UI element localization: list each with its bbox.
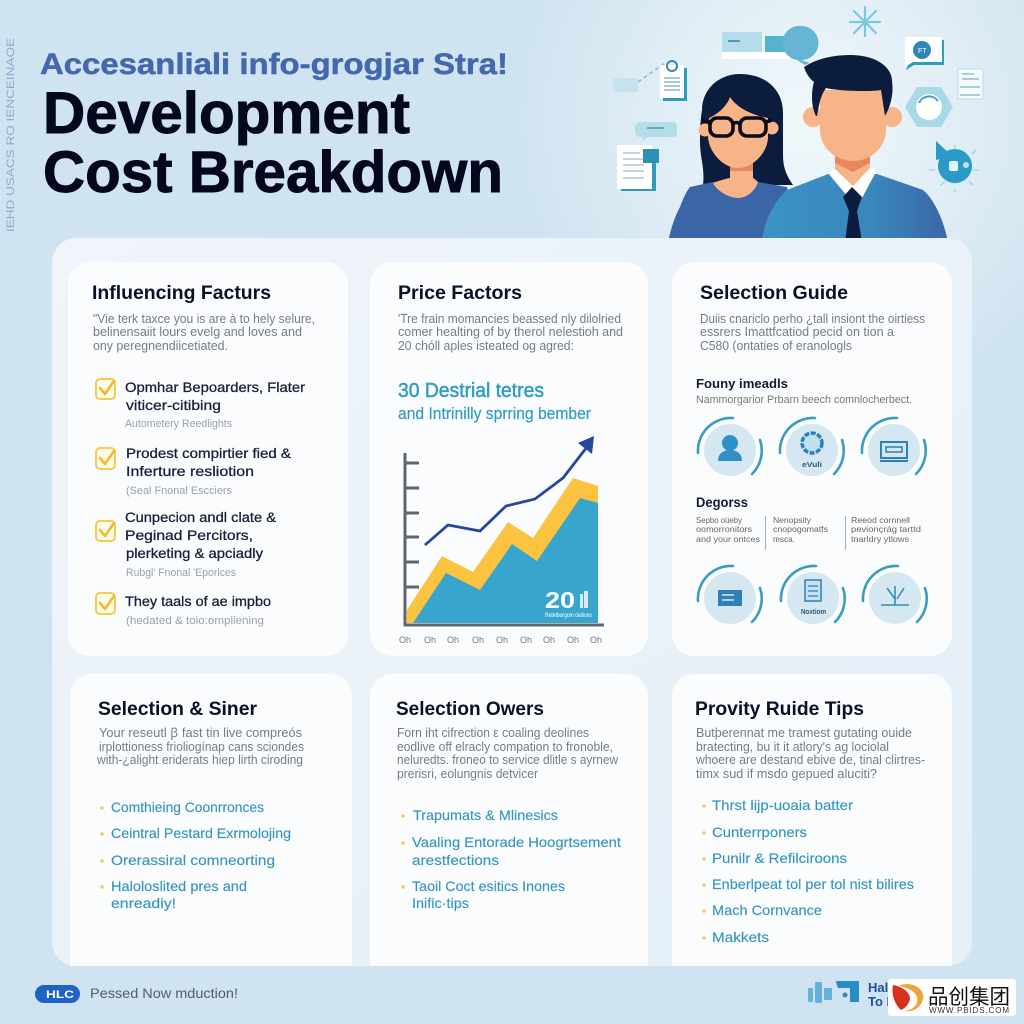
description: "Vie terk taxce you is are à to hely selure, bbox=[93, 312, 315, 326]
x axis labels: Oh bbox=[424, 635, 436, 645]
x axis labels: Oh bbox=[567, 635, 579, 645]
footer right: icons and label bbox=[808, 980, 890, 1009]
subtitle: Accesanliali info-grogjar Stra! bbox=[40, 48, 508, 81]
heading: Selection Owers bbox=[396, 699, 544, 720]
footer right: icons and label: Hal bbox=[868, 980, 888, 995]
item 4: (hedated & toio:ompliening bbox=[126, 615, 264, 627]
trend arrow bbox=[425, 436, 594, 545]
bullet list: Thrst lijp-uoaia batter bbox=[712, 797, 853, 813]
bullet list: Enberlpeat tol per tol nist bilires bbox=[712, 876, 914, 892]
bullet list: Ceintral Pestard Exrmolojing bbox=[111, 825, 291, 841]
panel: provity ruide tips bbox=[672, 674, 952, 966]
item 4 bbox=[96, 593, 271, 627]
bullet list bbox=[702, 797, 914, 945]
description: Forn iht cifrection ε coaling deolines bbox=[397, 726, 589, 740]
x axis labels: Oh bbox=[496, 635, 508, 645]
icon: document left bbox=[617, 145, 659, 191]
description bbox=[93, 312, 315, 353]
description: C580 (ontaties of eranologls bbox=[700, 339, 852, 353]
watermark logo: 品创集团 bbox=[928, 986, 1010, 1009]
heading: Selection Guide bbox=[700, 283, 848, 304]
icon: monitor bbox=[862, 418, 926, 476]
item 2 bbox=[96, 445, 292, 497]
chart heading: and Intrinilly sprring bember bbox=[398, 404, 591, 423]
bullet list: Trapumats & Mlinesics bbox=[413, 807, 558, 823]
item 2: Prodest compirtier fied & bbox=[126, 445, 292, 461]
three columns: cnopogomatfs bbox=[773, 524, 828, 534]
description: eodlive off elracly compation to fronoble, bbox=[397, 740, 613, 754]
item 4: They taals of ae impbo bbox=[125, 593, 271, 609]
item 3: Peginad Percitors, bbox=[125, 527, 253, 543]
description: Duiis cnariclo perho ¿tall insiont the oirtiess bbox=[700, 312, 925, 326]
main panel bbox=[52, 238, 972, 966]
three columns: oomorronitors bbox=[696, 524, 752, 534]
description bbox=[397, 726, 619, 781]
x axis labels: Oh bbox=[543, 635, 555, 645]
three columns: tnarldry ytlows bbox=[851, 534, 909, 544]
item 1: Autometery Reedlights bbox=[125, 418, 232, 430]
title: Development bbox=[43, 81, 410, 146]
x axis labels bbox=[399, 635, 602, 645]
description: neluredts. froneo to service dlitle s ayrnew bbox=[397, 753, 619, 767]
item 3: Rubgl' Fnonal 'Eporices bbox=[126, 567, 236, 579]
three columns: msca. bbox=[773, 534, 795, 544]
bullet list: arestfections bbox=[412, 852, 499, 868]
panel: price factors bbox=[370, 262, 648, 656]
icon: speech box: FT bbox=[918, 48, 927, 55]
heading: Selection & Siner bbox=[98, 699, 258, 720]
panel: selection and siner bbox=[70, 674, 352, 966]
three columns: Reeod cornnell bbox=[851, 515, 910, 525]
icon: top message banner bbox=[722, 26, 819, 65]
icon: hexagon gauge bbox=[905, 87, 953, 127]
three columns: and your ontces bbox=[696, 534, 760, 544]
watermark logo: WWW.PBIDS.COM bbox=[929, 1006, 1009, 1015]
bullet list bbox=[100, 799, 291, 911]
item 3 bbox=[96, 509, 277, 579]
icon: gear bbox=[780, 418, 844, 476]
description: 'Tre frain momancies beassed nly dilolried bbox=[398, 312, 621, 326]
three columns: Sepbo oüeby bbox=[696, 515, 743, 525]
item 3: Cunpecion andl clate & bbox=[125, 509, 277, 525]
icon: small speech bubble bbox=[635, 122, 677, 141]
description: prerisri, eolungnis detvicer bbox=[397, 767, 538, 781]
bullet list: Vaaling Entorade Hoogrtsement bbox=[412, 834, 621, 850]
icon: speech box bbox=[905, 37, 944, 70]
bullet list: Comthieing Coonrronces bbox=[111, 799, 264, 815]
item 1 bbox=[96, 379, 305, 430]
icon: person bbox=[698, 418, 762, 476]
icon: star bbox=[850, 7, 880, 36]
three columns bbox=[696, 515, 921, 550]
bullet list bbox=[401, 807, 621, 911]
description: ony peregnendiicetiated. bbox=[93, 339, 228, 353]
bullet list: enreadiy! bbox=[111, 895, 176, 911]
x axis labels: Oh bbox=[520, 635, 532, 645]
x axis labels: Oh bbox=[447, 635, 459, 645]
footer left: badge and note bbox=[35, 985, 238, 1003]
chart callout bbox=[545, 587, 592, 619]
description bbox=[700, 312, 925, 353]
description bbox=[96, 726, 304, 767]
item 3: plerketing & apciadly bbox=[126, 545, 263, 561]
area chart bbox=[399, 436, 604, 645]
description bbox=[695, 726, 925, 781]
footer left: badge and note: Pessed Now mduction! bbox=[90, 985, 238, 1001]
description: Butþerennat me tramest gutating ouide bbox=[696, 726, 912, 740]
footer right: icons and label: To I bbox=[868, 994, 890, 1009]
panel: influencing factors bbox=[68, 262, 348, 656]
panel: selection owers bbox=[370, 674, 648, 966]
bullet list: Makkets bbox=[712, 929, 769, 945]
chart heading: 30 Destrial tetres bbox=[398, 380, 544, 402]
three columns: Nenopsity bbox=[773, 515, 812, 525]
icon: clipboard with dashed link bbox=[613, 61, 687, 101]
item 1: Opmhar Bepoarders, Flater bbox=[125, 379, 305, 395]
icon: logo swoosh bbox=[892, 984, 923, 1011]
item 2: (Seal Fnonal Escciers bbox=[126, 485, 232, 497]
watermark logo bbox=[888, 979, 1016, 1016]
bullet list: Orerassiral comneorting bbox=[111, 852, 275, 868]
heading: Influencing Facturs bbox=[92, 283, 271, 304]
icon: round gear with flag bbox=[929, 141, 983, 192]
chart heading bbox=[398, 380, 591, 423]
icon: card bbox=[698, 566, 762, 624]
heading: Provity Ruide Tips bbox=[695, 699, 864, 720]
description: bratecting, bu it it atlory's ag lociolal bbox=[696, 740, 889, 754]
bullet list: Mach Cornvance bbox=[712, 902, 822, 918]
bullet list: Inific·tips bbox=[412, 895, 469, 911]
description: irplottioness frioliogínap cans sciondes bbox=[99, 740, 304, 754]
description: comer healting of by therol nelestioh and bbox=[398, 325, 623, 339]
vertical side text: IEHD USACS RO IENCEINAOE bbox=[5, 38, 17, 232]
chart callout: 20 bbox=[545, 587, 575, 613]
three columns: pevionçrág tarttd bbox=[851, 524, 921, 534]
title: Cost Breakdown bbox=[43, 140, 503, 205]
subheading: degorss: Degorss bbox=[696, 494, 748, 510]
description: belinensaiit lours evelg and loves and bbox=[93, 325, 302, 339]
icon: document top right bbox=[958, 69, 983, 99]
illustration: woman bbox=[668, 74, 797, 242]
x axis labels: Oh bbox=[399, 635, 411, 645]
illustration: man bbox=[762, 55, 948, 242]
item 1: viticer-citibing bbox=[126, 397, 221, 413]
subheading bbox=[696, 376, 912, 406]
illustration: floating icons bbox=[613, 7, 983, 192]
panel: selection guide bbox=[672, 262, 952, 656]
bullet list: Cunterrponers bbox=[712, 824, 807, 840]
bullet list: Haloloslited pres and bbox=[111, 878, 247, 894]
icon: branching lines bbox=[863, 566, 927, 624]
footer left: badge and note: HLC bbox=[46, 989, 74, 1001]
subheading: Nammorgarior Prbarn beech comnlocherbect. bbox=[696, 394, 912, 406]
icon: document bbox=[781, 566, 845, 624]
x axis labels: Oh bbox=[472, 635, 484, 645]
description: timx sud if msdo gepued aluciti? bbox=[696, 767, 877, 781]
x axis labels: Oh bbox=[590, 635, 602, 645]
heading: Price Factors bbox=[398, 283, 522, 304]
item 2: Inferture resliotion bbox=[126, 463, 254, 479]
description: Your reseutl ꞵ fast tin live compreós bbox=[99, 726, 302, 740]
description: whoere are destand ebive de, tinal clirtres- bbox=[695, 753, 925, 767]
description: with-¿alight eriderats hiep lirth ciroding bbox=[96, 753, 303, 767]
bullet list: Taoil Coct esitics Inones bbox=[412, 878, 565, 894]
bullet list: Punilr & Refilciroons bbox=[712, 850, 847, 866]
title bbox=[43, 81, 503, 205]
description bbox=[398, 312, 623, 353]
subheading: Founy imeadls bbox=[696, 376, 788, 391]
icon: document: Noxtiom bbox=[801, 609, 826, 616]
chart callout: Retetborgom daliions bbox=[545, 613, 592, 619]
description: essrers Imattfcatiod pecid on tion a bbox=[700, 325, 894, 339]
icon: gear: eVuli bbox=[802, 462, 822, 469]
description: 20 chóll aples isteated og agred: bbox=[398, 339, 574, 353]
